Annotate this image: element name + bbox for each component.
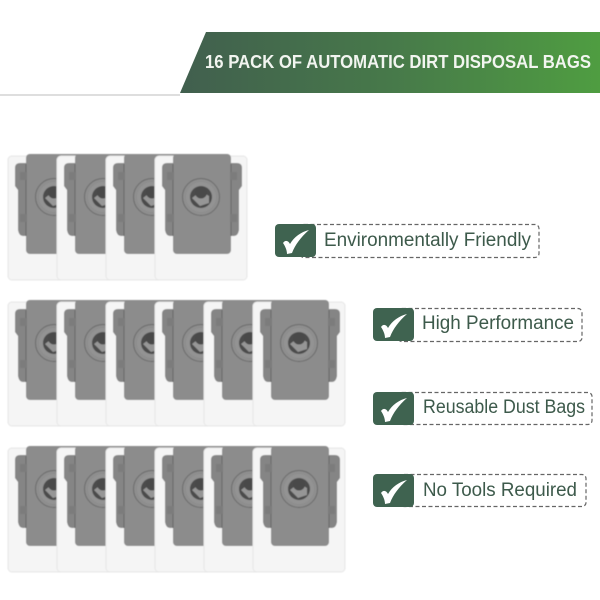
header divider line xyxy=(0,94,180,96)
feature: High Performance xyxy=(373,308,582,342)
product photo: dust bags xyxy=(8,154,345,572)
banner xyxy=(180,32,600,93)
feature: Reusable Dust Bags xyxy=(373,392,592,425)
feature: Environmentally Friendly xyxy=(275,224,539,258)
row of 6 bags, bottom xyxy=(8,446,345,572)
row of 4 bags xyxy=(8,154,247,280)
feature: Reusable Dust Bags: Reusable Dust Bags xyxy=(423,397,585,418)
feature: No Tools Required: No Tools Required xyxy=(423,480,577,501)
row of 6 bags, middle xyxy=(8,300,345,426)
feature: High Performance: High Performance xyxy=(422,313,574,334)
feature: No Tools Required xyxy=(373,474,586,507)
feature: Environmentally Friendly: Environmentally Friendly xyxy=(324,230,531,251)
